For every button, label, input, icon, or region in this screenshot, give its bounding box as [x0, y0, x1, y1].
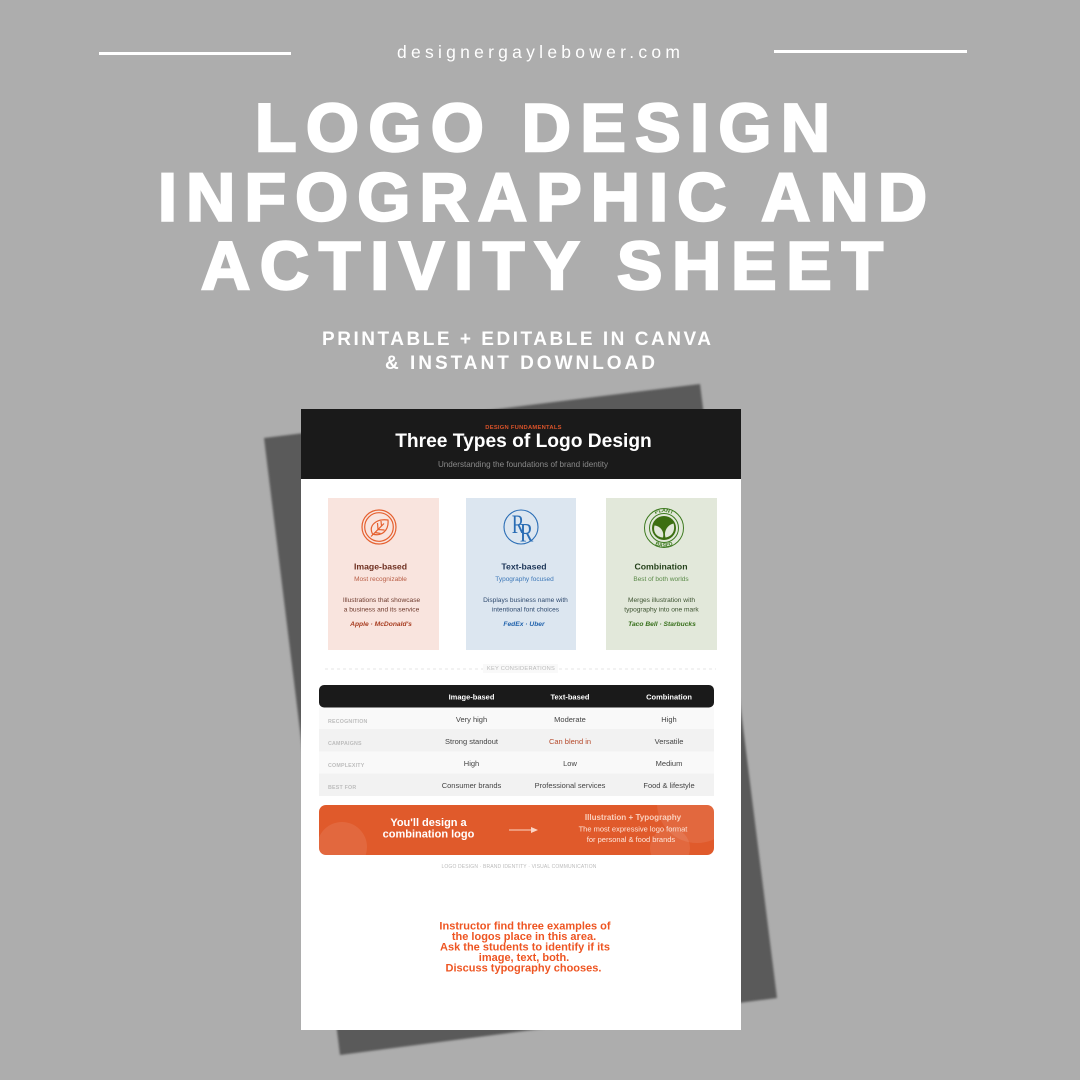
table header row	[319, 685, 714, 708]
table values: Food & lifestyle	[643, 781, 695, 790]
card: combination: Merges illustration with	[628, 597, 695, 604]
card: image-based: a business and its service	[344, 606, 420, 614]
sheet header: Understanding the foundations of brand identity	[438, 460, 609, 469]
sheet header	[301, 409, 741, 479]
main title: INFOGRAPHIC AND	[158, 160, 927, 236]
subtitle: & INSTANT DOWNLOAD	[385, 353, 655, 374]
table row labels	[328, 719, 368, 791]
card: text-based	[466, 498, 576, 650]
instructor note: the logos place in this area.	[452, 931, 596, 943]
callout banner: for personal & food brands	[587, 835, 675, 844]
card: image-based	[328, 498, 439, 650]
table values: High	[464, 759, 479, 768]
main title	[158, 90, 927, 304]
icon: RR monogram	[504, 510, 538, 548]
instructor note: Discuss typography chooses.	[446, 962, 601, 974]
card: text-based: Text-based	[501, 562, 547, 572]
table values: Very high	[456, 715, 487, 724]
sheet header: DESIGN FUNDAMENTALS	[485, 425, 562, 431]
comparison table	[319, 685, 714, 796]
card: text-based: Typography focused	[495, 576, 554, 583]
table row labels: CAMPAIGNS	[328, 741, 362, 747]
table values: Consumer brands	[442, 781, 502, 790]
card: text-based: FedEx · Uber	[503, 621, 545, 628]
main title: ACTIVITY SHEET	[201, 228, 883, 304]
table values: Medium	[656, 759, 682, 768]
section divider: key considerations	[325, 664, 716, 673]
table values: Versatile	[655, 737, 683, 746]
callout banner: The most expressive logo format	[579, 824, 688, 834]
callout banner: combination logo	[383, 828, 475, 840]
table header row: Text-based	[550, 692, 590, 702]
card: combination: Taco Bell · Starbucks	[628, 621, 696, 628]
card: image-based: Apple · McDonald's	[349, 621, 412, 628]
icon: plant based badge	[644, 508, 684, 548]
icon: plant based badge: BASED	[655, 542, 672, 547]
subtitle: PRINTABLE + EDITABLE IN CANVA	[322, 329, 711, 350]
callout banner	[319, 805, 714, 855]
poster canvas	[99, 45, 967, 1056]
card: text-based: Displays business name with	[483, 597, 568, 604]
table values: Moderate	[554, 715, 586, 724]
table values	[442, 715, 695, 790]
tilted sheet shadow	[264, 384, 777, 1055]
activity sheet	[301, 409, 741, 1030]
table row labels: BEST FOR	[328, 785, 356, 791]
website address: designergaylebower.com	[397, 42, 680, 62]
table values: Low	[563, 759, 577, 768]
main title: LOGO DESIGN	[255, 90, 830, 166]
card: combination	[606, 498, 717, 650]
sheet paper	[301, 409, 741, 1030]
table row labels: COMPLEXITY	[328, 763, 365, 769]
table header row: Image-based	[449, 692, 495, 702]
table values: Can blend in	[549, 737, 591, 746]
table values: Strong standout	[445, 737, 499, 746]
table row labels: RECOGNITION	[328, 719, 368, 725]
icon: leaf badge	[362, 510, 396, 544]
card: combination: Best of both worlds	[633, 576, 689, 583]
callout banner: Illustration + Typography	[585, 813, 682, 822]
card: combination: typography into one mark	[624, 606, 699, 614]
icon: RR monogram: R	[520, 519, 534, 548]
table values: Professional services	[535, 781, 606, 790]
instructor note: Ask the students to identify if its	[440, 942, 610, 954]
card: combination: Combination	[634, 562, 688, 572]
card: image-based: Illustrations that showcase	[343, 597, 420, 604]
card: image-based: Most recognizable	[354, 576, 407, 583]
callout banner: You'll design a	[390, 817, 468, 829]
arrow	[509, 827, 538, 833]
instructor note: Instructor find three examples of	[439, 920, 611, 932]
table header row: Combination	[646, 692, 692, 702]
header rule: left	[99, 52, 291, 55]
icon: plant based badge: PLANT	[654, 509, 674, 514]
icon: RR monogram: R	[512, 510, 525, 539]
header rule: right	[774, 50, 967, 53]
section divider: key considerations: KEY CONSIDERATIONS	[487, 666, 555, 672]
sheet footer: LOGO DESIGN · BRAND IDENTITY · VISUAL COMMUNICATION	[441, 864, 597, 870]
table values: High	[661, 715, 677, 724]
instructor note	[439, 920, 611, 974]
card: text-based: intentional font choices	[492, 606, 560, 614]
subtitle	[322, 329, 711, 374]
sheet header: Three Types of Logo Design	[395, 431, 652, 452]
instructor note: image, text, both.	[479, 952, 569, 964]
card: image-based: Image-based	[354, 562, 407, 572]
